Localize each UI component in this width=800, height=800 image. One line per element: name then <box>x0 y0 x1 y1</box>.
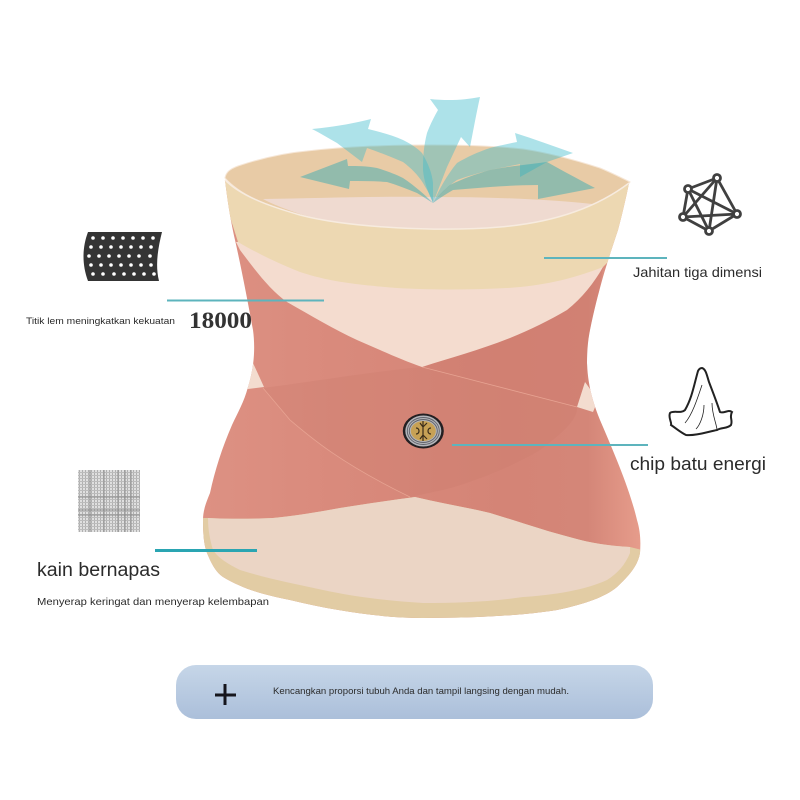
panel: bottom banner <box>176 665 653 719</box>
garment inner pale lining <box>263 197 601 230</box>
panel: waist shaper garment <box>190 145 650 630</box>
label: 18000: 18000 <box>189 308 252 333</box>
icon: energy stone chip <box>403 414 444 448</box>
label: 3D stitching: Jahitan tiga dimensi <box>633 264 762 280</box>
leader line: energy chip <box>452 444 648 446</box>
lower beige hem <box>203 497 640 618</box>
arrow: upper right <box>433 133 573 203</box>
label: energy stone chip: chip batu energi <box>630 454 766 474</box>
banner text: Kencangkan proporsi tubuh Anda dan tampil langsing dengan mudah. <box>273 686 569 697</box>
label: breathable fabric: kain bernapas <box>37 560 160 581</box>
arrow: lower left <box>300 159 433 203</box>
label: breathable fabric description: Menyerap keringat dan menyerap kelembapan <box>37 596 269 608</box>
icon: 3D stitching network <box>680 174 740 234</box>
fabric crease lines <box>263 367 577 497</box>
label: glue dots description: Titik lem meningkatkan kekuatan <box>26 316 175 327</box>
leader line: stitching <box>544 257 667 259</box>
garment body in salmon <box>190 170 650 630</box>
arrow: lower right <box>433 162 595 203</box>
icon: glue dot panel <box>84 232 162 281</box>
icon: plus <box>215 684 236 705</box>
arrow: up <box>423 97 480 203</box>
arrows: breathability airflow <box>300 97 595 203</box>
lower pale panel <box>208 497 630 603</box>
garment back inner band <box>225 145 630 229</box>
upper pale panel <box>236 242 604 367</box>
right arm shading <box>587 290 600 367</box>
side pale triangles <box>240 363 598 412</box>
leader line: breathable fabric <box>155 549 257 552</box>
icon: breathable fabric swatch <box>78 470 140 532</box>
garment top rim <box>225 180 629 229</box>
arrow: upper left <box>312 119 433 203</box>
upper beige band <box>225 181 629 290</box>
icon: energy stone <box>669 368 732 435</box>
central crossed band shading <box>263 367 577 497</box>
leader line: glue dots <box>167 300 324 302</box>
